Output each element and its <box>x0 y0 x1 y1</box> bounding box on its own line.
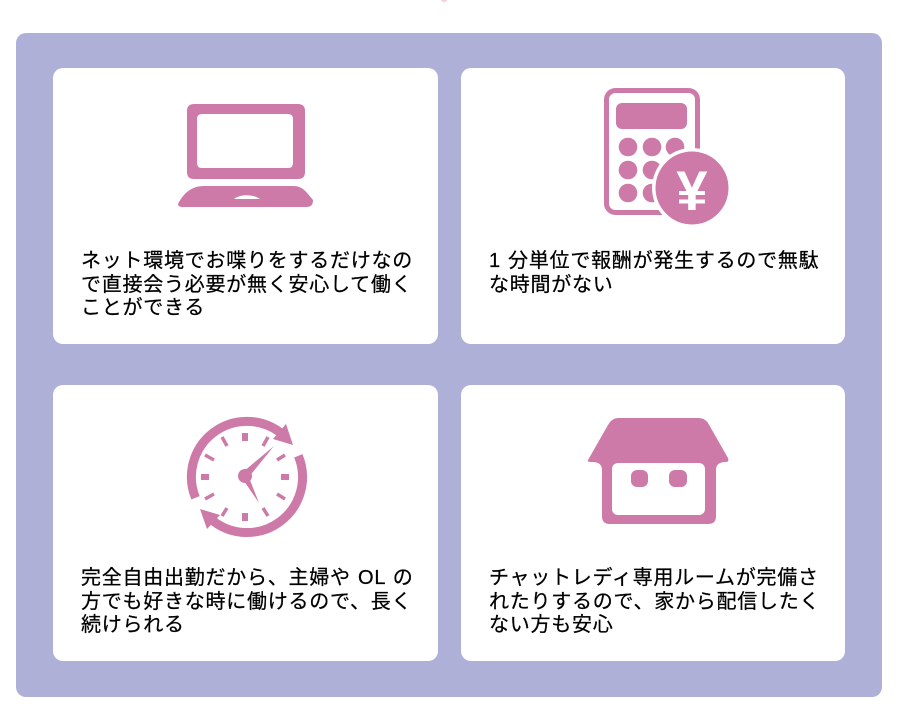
text: calculator <box>489 250 819 296</box>
text: laptop: ことができる <box>81 297 205 319</box>
card: clock <box>53 385 438 661</box>
icon: house <box>588 418 728 524</box>
text: laptop <box>81 250 413 319</box>
top pink mark <box>441 0 447 2</box>
icon: laptop <box>178 104 313 207</box>
text: house: れたりするので、家から配信したく <box>489 590 820 612</box>
text: house <box>489 566 820 636</box>
text: clock <box>81 566 414 636</box>
text: clock: 方でも好きな時に働けるので、長く <box>81 590 412 612</box>
text: calculator: 1 分単位で報酬が発生するので無駄 <box>489 250 819 272</box>
text: laptop: ネット環境でお喋りをするだけなの <box>81 250 413 272</box>
card: laptop <box>53 68 438 344</box>
text: clock: 続けられる <box>81 614 185 636</box>
text: clock: 完全自由出勤だから、主婦や OL の <box>81 567 414 589</box>
icon: calculator with yen coin <box>604 88 728 224</box>
icon: clock with arrows <box>186 416 308 537</box>
card: calculator <box>461 68 845 344</box>
card: house <box>461 385 845 661</box>
text: laptop: で直接会う必要が無く安心して働く <box>81 274 412 296</box>
text: house: ない方も安心 <box>489 614 614 636</box>
text: house: チャットレディ専用ルームが完備さ <box>489 567 819 589</box>
icon: calculator with yen coin: ¥ <box>676 159 708 222</box>
text: calculator: な時間がない <box>489 274 614 296</box>
